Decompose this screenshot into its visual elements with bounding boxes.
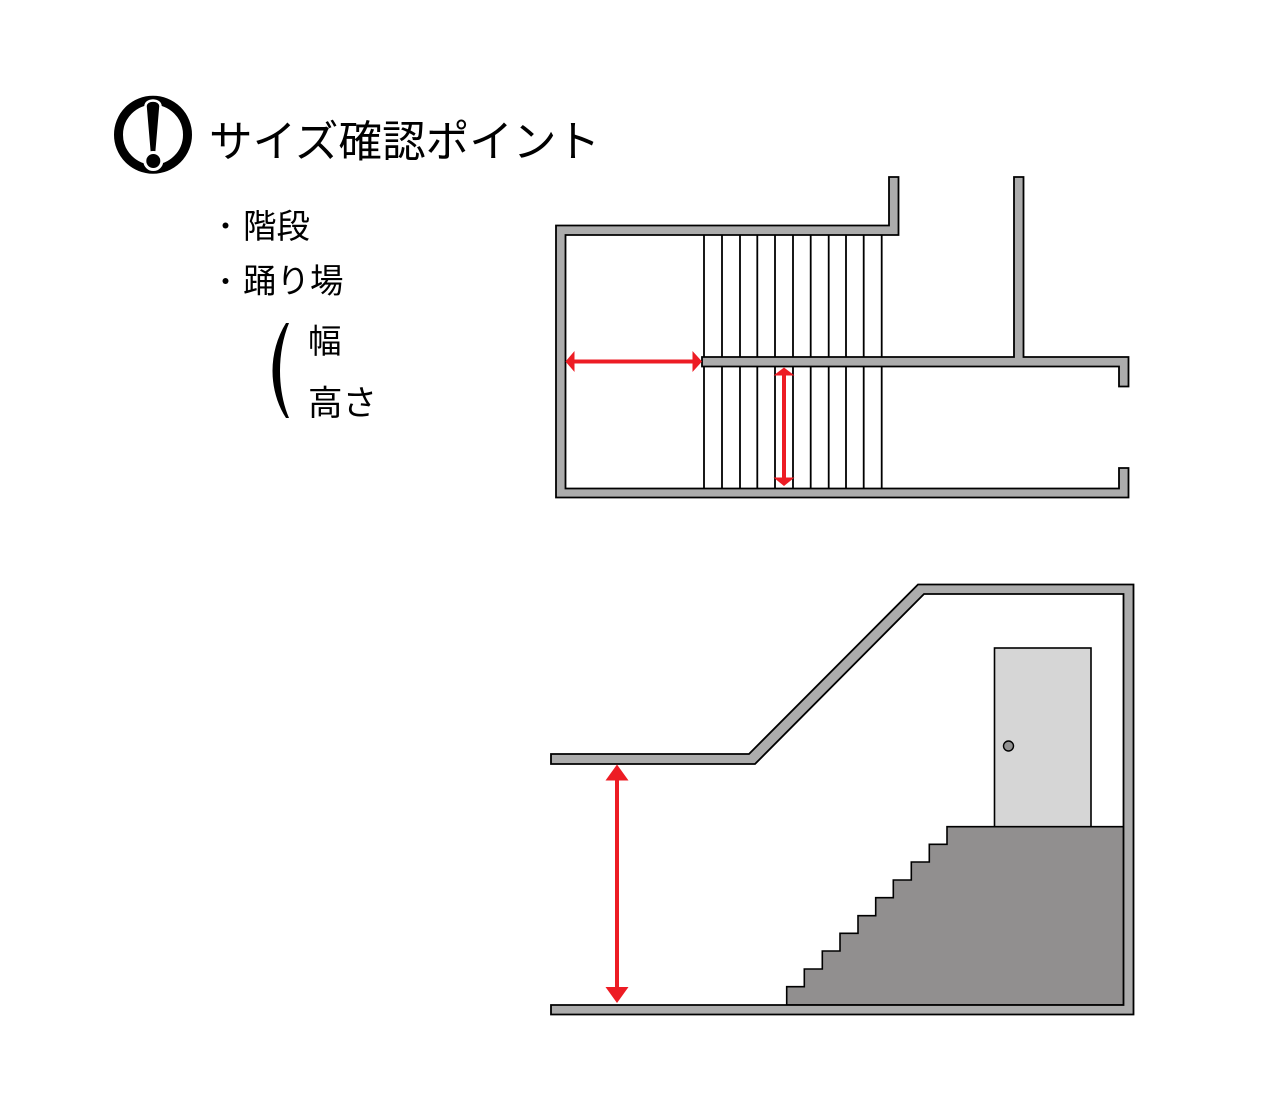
centre wall bbox=[702, 177, 1128, 386]
section view diagram bbox=[551, 584, 1134, 1014]
arrow: ceiling height bbox=[606, 764, 628, 1003]
arrow: landing width bbox=[566, 351, 702, 372]
list item: landing: 踊り場 bbox=[243, 264, 344, 300]
list sub-item: height: 高さ bbox=[308, 385, 377, 423]
door bbox=[994, 648, 1091, 828]
ceiling, wall and floor bbox=[551, 584, 1134, 1014]
stairs and landing bbox=[787, 827, 1124, 1005]
plan view diagram bbox=[556, 177, 1128, 498]
icon: exclamation mark in ring bbox=[118, 100, 188, 170]
outer wall bbox=[556, 177, 1128, 498]
text block: checklist bbox=[222, 209, 377, 423]
door knob bbox=[1004, 741, 1014, 751]
title: サイズ確認ポイント bbox=[209, 119, 600, 167]
list item: stairs: 階段 bbox=[243, 209, 310, 246]
list sub-item: width: 幅 bbox=[308, 324, 342, 361]
stair tread lines bbox=[704, 235, 882, 489]
arrow: stair width bbox=[774, 368, 794, 486]
bracket bbox=[272, 323, 289, 418]
